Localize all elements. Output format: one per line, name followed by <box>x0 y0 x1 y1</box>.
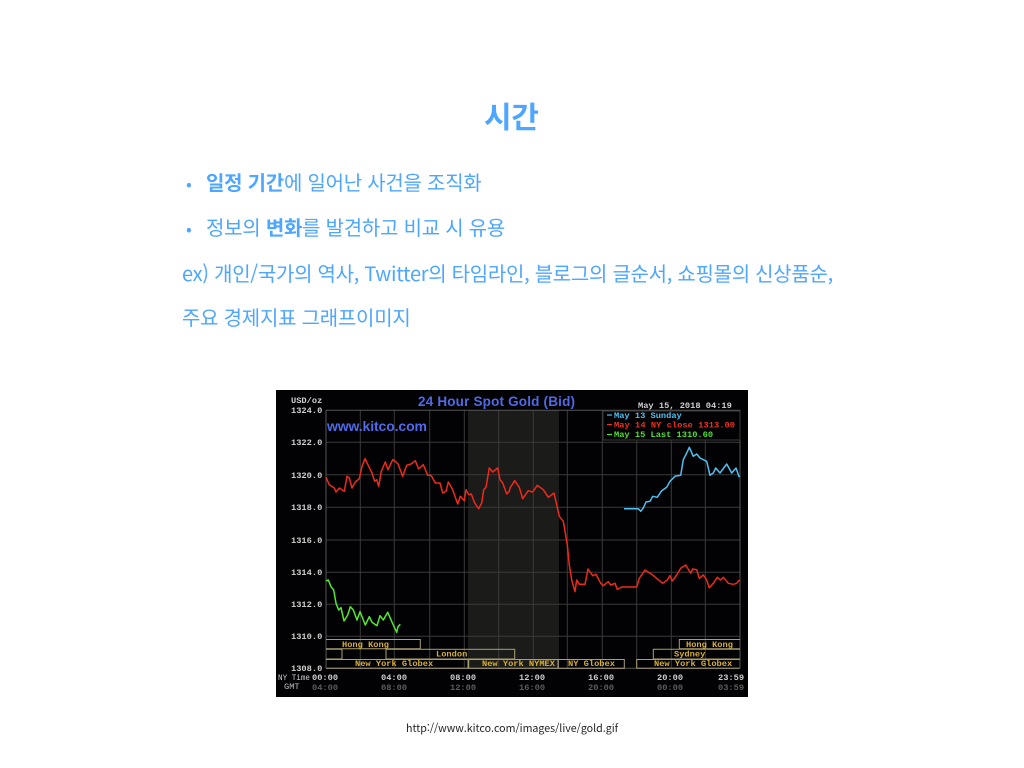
session labels: Hong Kong <box>686 640 733 650</box>
x-axis labels: NY time: 20:00 <box>657 673 683 683</box>
y-axis labels: 1314.0 <box>291 568 322 578</box>
session labels <box>342 640 733 669</box>
y-axis labels: 1312.0 <box>291 600 322 610</box>
examples text line 1: ex) 개인/국가의 역사, Twitter의 타임라인, 블로그의 글순서, 쇼핑몰의 신상품순, <box>182 258 833 287</box>
session labels: NY Globex <box>568 659 615 669</box>
legend box <box>603 411 740 440</box>
y-axis labels: 1308.0 <box>291 664 322 674</box>
session labels: Hong Kong <box>342 640 389 650</box>
x-axis labels: GMT: 20:00 <box>588 683 614 693</box>
x-axis labels: GMT: 00:00 <box>657 683 683 693</box>
session labels: London <box>436 650 467 660</box>
chart title: 24 Hour Spot Gold (Bid) <box>418 394 575 409</box>
x-axis labels: NY time: 08:00 <box>450 673 476 683</box>
green price line: May 15 <box>326 580 400 632</box>
y-axis labels: 1310.0 <box>291 632 322 642</box>
blue price line: May 13 <box>624 447 739 511</box>
chart date: May 15, 2018 04:19 <box>638 401 732 411</box>
market session boxes <box>326 640 740 668</box>
y-axis labels: 1318.0 <box>291 503 322 513</box>
x-axis labels: NY time: NY Time <box>278 673 310 683</box>
x-axis labels: GMT: 12:00 <box>450 683 476 693</box>
x-axis labels: NY time: 23:59 <box>718 673 744 683</box>
x-axis labels: NY time: 04:00 <box>381 673 407 683</box>
x-axis labels: NY time: 00:00 <box>312 673 338 683</box>
session labels: Sydney <box>674 650 706 660</box>
session labels: New York Globex <box>355 659 433 669</box>
title: 시간 <box>484 93 539 137</box>
bullet: organizing events over a period: 일정 기간에 일어난 사건을 조직화 <box>206 167 482 196</box>
legend box: May 13 Sunday <box>614 411 683 421</box>
session labels: New York NYMEX <box>482 659 556 669</box>
session labels: New York Globex <box>654 659 732 669</box>
source url: http://www.kitco.com/images/live/gold.gif <box>406 721 618 736</box>
y-axis labels: 1324.0 <box>291 406 322 416</box>
x-axis labels: GMT: 04:00 <box>312 683 338 693</box>
bullet: organizing events over a period: • <box>186 170 192 195</box>
bullet: finding and comparing change: • <box>186 215 192 240</box>
legend box: May 15 Last 1310.60 <box>614 430 713 440</box>
legend box: May 14 NY close 1313.00 <box>614 420 735 430</box>
x-axis labels: GMT: 16:00 <box>519 683 545 693</box>
red price line: May 14 <box>326 459 739 592</box>
examples text line 2: 주요 경제지표 그래프이미지 <box>182 302 410 331</box>
y-axis labels: 1320.0 <box>291 471 322 481</box>
bullet: finding and comparing change: 정보의 변화를 발견하고 비교 시 유용 <box>206 212 505 241</box>
watermark: www.kitco.com <box>326 418 427 434</box>
y-axis labels: USD/oz <box>291 396 322 406</box>
x-axis labels: GMT: GMT <box>284 682 300 692</box>
y-axis labels <box>291 396 322 674</box>
x-axis labels: NY time <box>278 673 744 683</box>
x-axis labels: NY time: 12:00 <box>519 673 545 683</box>
x-axis labels: NY time: 16:00 <box>588 673 614 683</box>
x-axis labels: GMT <box>284 682 744 693</box>
y-axis labels: 1322.0 <box>291 438 322 448</box>
x-axis labels: GMT: 03:59 <box>718 683 744 693</box>
x-axis labels: GMT: 08:00 <box>381 683 407 693</box>
y-axis labels: 1316.0 <box>291 536 322 546</box>
